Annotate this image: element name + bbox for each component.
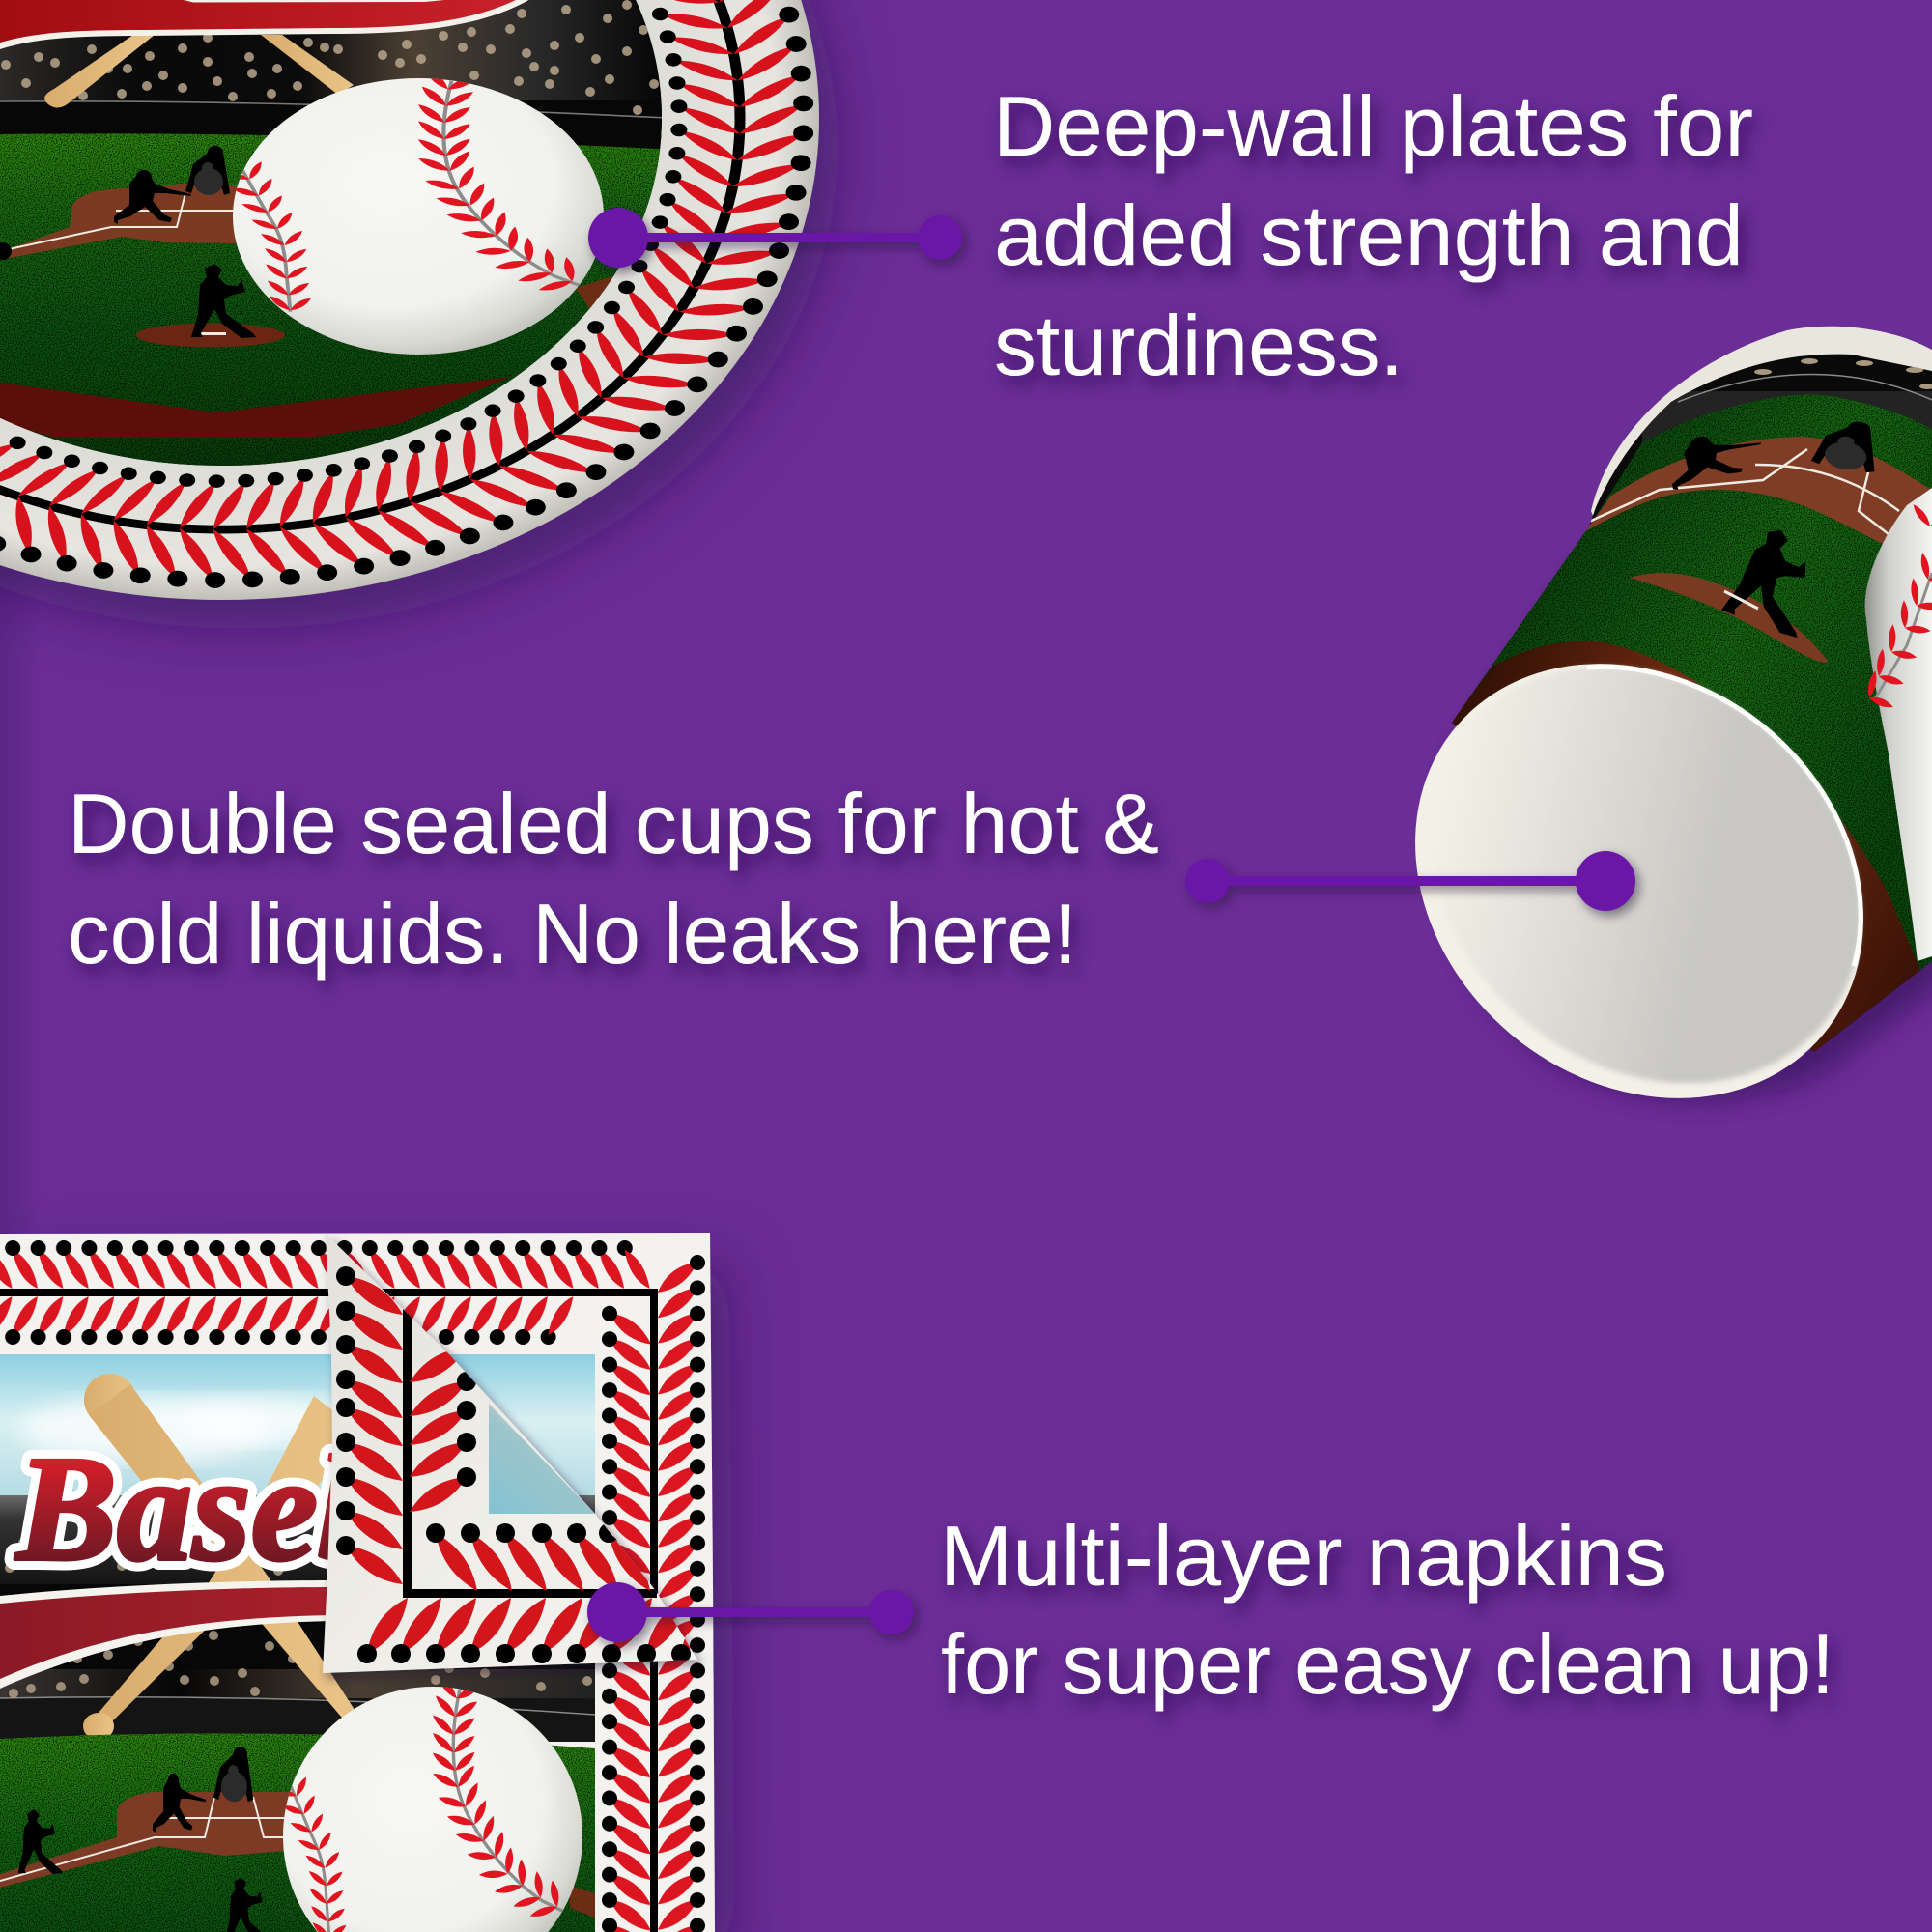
napkin crossed bats <box>83 1374 358 1740</box>
home plate detail <box>576 276 614 309</box>
text block: plates <box>993 78 1753 393</box>
cup baselines <box>1589 449 1899 534</box>
napkin silhouettes <box>18 1747 270 1932</box>
baseball <box>222 69 604 355</box>
cup silhouettes <box>1662 415 1881 491</box>
cup body artwork <box>1439 348 1932 1082</box>
text block: cups: cold liquids. No leaks here! <box>68 886 1077 981</box>
silhouettes: batter, catcher, pitcher <box>0 146 256 338</box>
cup infield dirt <box>1585 437 1932 580</box>
napkin baselines <box>0 1797 290 1881</box>
callout: cup connector <box>1185 851 1635 911</box>
napkin stitched border <box>0 1236 710 1932</box>
panel: folded napkin <box>0 1233 722 1932</box>
plate rim stitching <box>0 0 814 589</box>
napkin infield dirt <box>0 1792 290 1888</box>
cup shadow <box>1444 504 1932 1100</box>
warning track <box>0 377 510 438</box>
infield dirt <box>0 184 238 260</box>
text block: napkins <box>940 1508 1834 1712</box>
cup base <box>1327 574 1932 1188</box>
cup brown band <box>1439 641 1922 1058</box>
napkin banner <box>0 1580 333 1689</box>
cup baseball <box>1859 488 1932 961</box>
icon: crossed bats <box>44 35 354 108</box>
napkin sheet <box>0 1233 715 1932</box>
panel: deep-wall plate <box>0 0 819 600</box>
cup pitcher <box>1721 521 1830 639</box>
cup pitching rubber <box>1724 591 1758 609</box>
cup back rim <box>1591 327 1932 541</box>
text block: plates: added strength and <box>994 187 1744 283</box>
callout: plate connector <box>588 208 962 268</box>
pitcher mound <box>136 323 285 348</box>
text block: plates: sturdiness. <box>994 298 1404 393</box>
text block: cups <box>68 776 1159 981</box>
cup pitcher mound <box>1630 573 1828 663</box>
text block: napkins: for super easy clean up! <box>941 1616 1834 1712</box>
text block: cups: Double sealed cups for hot & <box>68 776 1159 871</box>
napkin artwork <box>0 1354 595 1932</box>
baselines <box>11 195 234 249</box>
cup grass <box>1452 395 1932 1052</box>
title script: Baseball: Baseball <box>14 1425 553 1592</box>
banner <box>0 0 532 49</box>
text block: napkins: Multi-layer napkins <box>940 1508 1667 1604</box>
napkin grass field <box>0 1733 595 1932</box>
text block: plates: Deep-wall plates for <box>993 78 1753 174</box>
title script: Baseball: Baseball <box>14 1425 553 1592</box>
grass field <box>0 133 676 483</box>
napkin baseball <box>274 1676 582 1932</box>
panel: paper cup <box>1415 327 1932 1109</box>
plate artwork: stadium, field and ball <box>0 0 676 483</box>
napkin right dirt <box>570 1886 595 1918</box>
callout: napkin connector <box>587 1582 914 1642</box>
folded corner flap <box>323 1234 722 1673</box>
